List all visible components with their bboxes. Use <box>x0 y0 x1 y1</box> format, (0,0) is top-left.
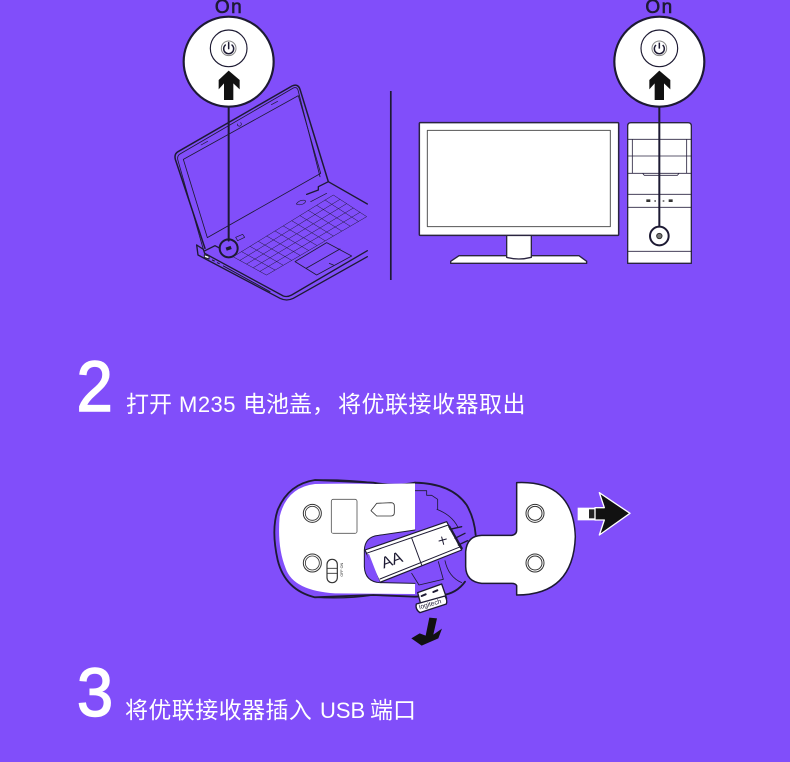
panel: laptop power-on illustration <box>175 17 367 300</box>
battery <box>365 522 468 582</box>
cover screws <box>526 504 544 572</box>
laptop lid <box>175 85 328 249</box>
laptop base <box>197 182 367 300</box>
power button glyph <box>226 246 232 251</box>
laptop ports <box>204 255 270 292</box>
USB receiver <box>416 584 447 613</box>
zoom circle <box>184 17 274 107</box>
monitor stand base <box>451 256 587 263</box>
step number 3: 3 <box>77 654 113 731</box>
step 2 instruction: 将优联接收器取出 <box>338 391 526 417</box>
battery cover <box>466 483 575 595</box>
arrow: cover off <box>578 493 630 535</box>
battery: AA <box>379 549 405 572</box>
computer tower <box>628 123 691 263</box>
panel: desktop power-on illustration <box>419 17 704 263</box>
mouse feet and details <box>303 499 394 583</box>
step 2 instruction: 打开 <box>126 391 172 417</box>
zoom circle <box>614 17 704 107</box>
step 3 instruction: 端口 <box>370 697 416 723</box>
divider <box>390 91 392 280</box>
mouse white underside <box>279 483 415 594</box>
callout line to power button <box>226 106 232 241</box>
power button ring <box>220 239 238 257</box>
step 3 instruction: USB <box>320 698 365 723</box>
laptop trackpad <box>295 243 352 275</box>
mouse internal details <box>412 491 462 585</box>
callout line to tower button <box>656 106 662 227</box>
step 2 instruction: M235 <box>179 392 236 417</box>
monitor <box>419 123 619 235</box>
monitor neck <box>507 233 531 259</box>
USB receiver: logitech <box>418 598 443 611</box>
step number 2: 2 <box>76 348 113 427</box>
arrow: receiver out <box>411 618 442 646</box>
step 2 instruction: 电池盖， <box>243 391 335 417</box>
mouse outer shell <box>274 480 476 598</box>
tower power button <box>650 227 669 245</box>
panel: mouse battery cover illustration <box>274 480 630 646</box>
step 3 instruction: 将优联接收器插入 <box>125 697 312 723</box>
mouse switch label: OFF ON <box>340 562 344 577</box>
laptop keyboard <box>233 195 367 275</box>
